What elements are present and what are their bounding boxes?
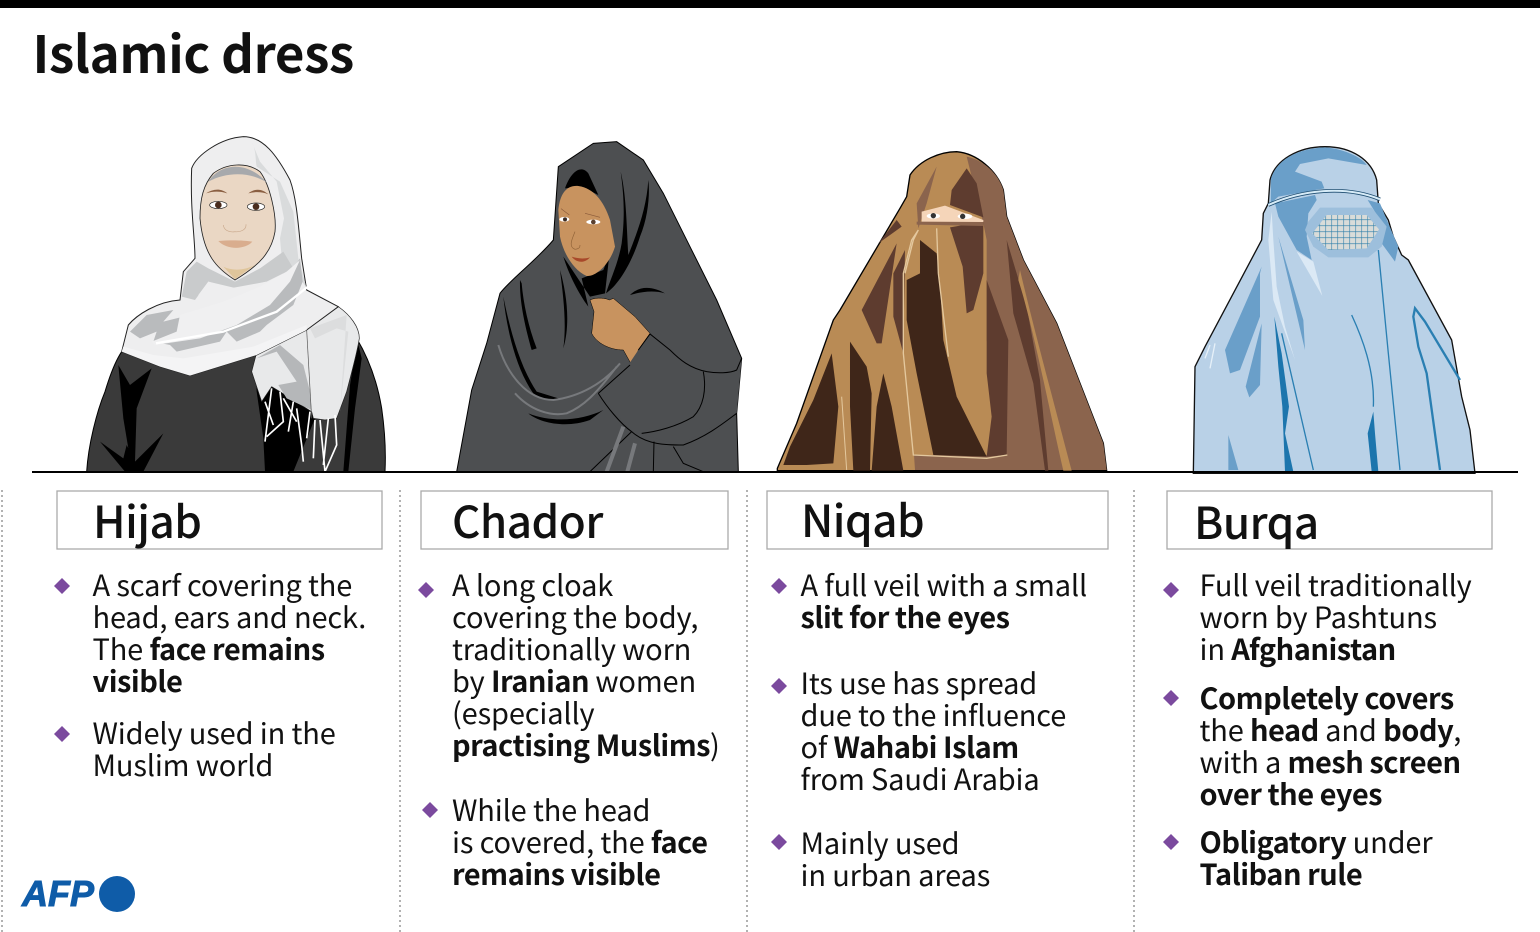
bullets: chador: While the head (452, 788, 650, 830)
heading: niqab: Niqab (801, 486, 924, 550)
bullets: niqab: Its use has spread (800, 661, 1037, 703)
bullets: niqab: of (800, 725, 834, 767)
bullets: burqa: Afghanistan (1230, 627, 1396, 669)
logo: AFP (21, 873, 135, 914)
bullets: chador: practising Muslims (452, 723, 710, 765)
bullets: burqa: over the eyes (1200, 772, 1382, 814)
bullets: chador: face (651, 820, 707, 862)
heading: hijab: Hijab (93, 487, 201, 551)
bullets: burqa: Full veil traditionally (1200, 563, 1472, 605)
bullets: hijab: Muslim world (92, 743, 273, 785)
logo: AFP: AFP (21, 873, 95, 914)
bullets: hijab: visible (92, 659, 182, 701)
bullets: hijab: face remains (149, 627, 325, 669)
bullets: niqab: Wahabi Islam (834, 725, 1019, 767)
bullets: niqab: slit for the eyes (800, 595, 1010, 637)
panel: niqab (767, 486, 1108, 895)
bullets: chador: is covered, the (452, 820, 651, 862)
bullets: hijab: A scarf covering the (92, 563, 352, 605)
top bar (0, 0, 1540, 8)
illustration: burqa (1193, 147, 1475, 473)
bullets: burqa: in (1200, 627, 1231, 669)
bullets: burqa: under (1346, 820, 1433, 862)
bullets: niqab: from Saudi Arabia (800, 757, 1040, 799)
bullets: burqa (1163, 563, 1472, 894)
bullets: burqa: Completely covers (1200, 676, 1454, 718)
bullets: chador (418, 563, 720, 894)
bullets: burqa: mesh screen (1288, 740, 1461, 782)
panel: hijab (54, 487, 382, 785)
bullets: niqab: A full veil with a small (800, 563, 1087, 605)
heading: hijab (57, 487, 382, 551)
bullets: chador: Iranian women (491, 659, 696, 701)
panel: chador (418, 487, 728, 894)
heading: burqa (1167, 488, 1492, 552)
heading: burqa: Burqa (1194, 488, 1319, 552)
bullets: chador: ) (710, 723, 720, 765)
illustration: niqab (777, 152, 1107, 471)
bullets: hijab: Widely used in the (92, 711, 336, 753)
bullets: chador: covering the body, (452, 595, 698, 637)
bullets: chador: by (452, 659, 491, 701)
bullets: chador: A long cloak (452, 563, 613, 605)
bullets: niqab: Mainly used (800, 821, 959, 863)
bullets: chador: traditionally worn (452, 627, 691, 669)
bullets: niqab: in urban areas (800, 853, 990, 895)
illustration: chador (457, 142, 742, 472)
bullets: niqab (771, 563, 1087, 895)
bullets: hijab: The (92, 627, 149, 669)
bullets: burqa: with a (1200, 740, 1288, 782)
bullets: hijab (54, 563, 366, 785)
panel: burqa (1163, 488, 1492, 894)
heading: chador (421, 487, 728, 551)
bullets: burqa: Taliban rule (1200, 852, 1362, 894)
illustration: hijab (87, 137, 385, 472)
bullets: niqab: due to the influence (800, 693, 1066, 735)
heading: niqab (767, 486, 1108, 550)
bullets: burqa: head and body, (1250, 708, 1461, 750)
heading: chador: Chador (452, 487, 604, 551)
bullets: chador: (especially (452, 691, 595, 733)
bullets: hijab: head, ears and neck. (92, 595, 366, 637)
baseline rule (32, 471, 1518, 473)
bullets: chador: remains visible (452, 852, 660, 894)
bullets: burqa: worn by Pashtuns (1200, 595, 1437, 637)
title: Islamic dress (32, 14, 354, 88)
bullets: burqa: the (1200, 708, 1250, 750)
bullets: burqa: Obligatory (1200, 820, 1347, 862)
